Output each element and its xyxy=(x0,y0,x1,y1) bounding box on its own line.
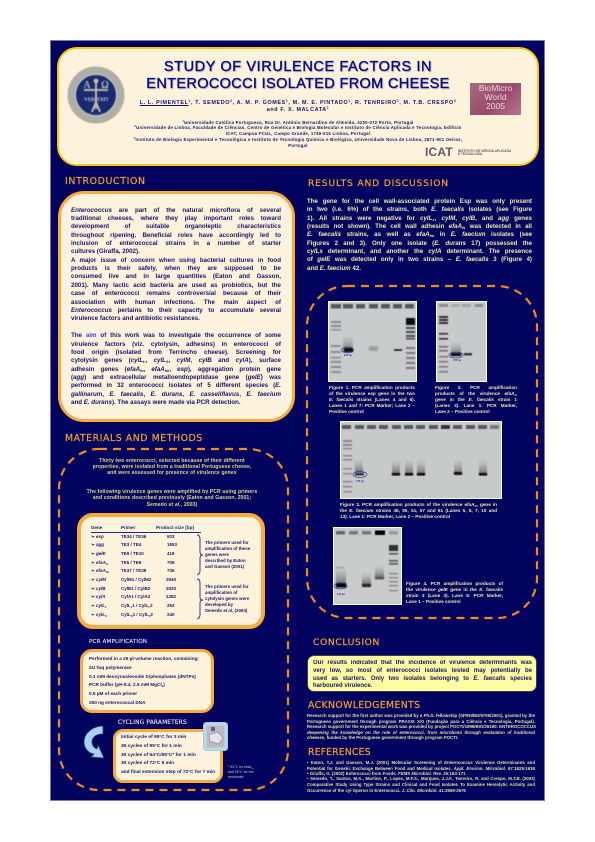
text: cycling steps: Initial cycle of 95°C for 3 min xyxy=(121,735,186,740)
text: results: of gelE was detected only in two strains – E. faecalis 3 (Figure 4) xyxy=(307,256,532,263)
panel: primer table xyxy=(77,513,265,629)
caption: figure 2: products of the virulence efaAfs xyxy=(435,391,517,397)
text: primer notes: developed by xyxy=(205,602,233,607)
table: genes and primers: ➢ efaA fm xyxy=(91,568,109,574)
text: introduction: adhesin genes (efaAfs, efaAfm, esp), aggregation protein gene xyxy=(71,366,281,373)
text: PCR recipe: 0.5 µM of each primer xyxy=(89,691,137,696)
text: primer notes: described by Eaton xyxy=(205,558,246,563)
table: genes and primers: TE9 / TE10 xyxy=(121,551,144,556)
table: genes and primers: CylM1 / CylM2 xyxy=(121,577,151,582)
text: references: • Giraffa, G. (2002) Enterococci from Foods. FEMS Microbiol. Rev. 26:163-171 xyxy=(307,770,465,776)
caption: figure 4: strain 3 (Lane 3). Lane 5: PCR Marker, xyxy=(406,593,503,598)
text: conclusion xyxy=(313,660,532,689)
text: introduction: gallinarum, E. faecalis, E. durans, E. casseliflavus, E. faecium xyxy=(71,391,281,398)
caption: figure 2 xyxy=(435,385,517,414)
table: genes and primers: ➢ cylB xyxy=(91,586,106,591)
text: cycling steps: 35 cycles of 95°C for 1 min xyxy=(121,744,182,749)
text: PCR recipe xyxy=(89,656,199,705)
logo: university seal xyxy=(67,66,125,124)
text: methods intro: and conditions described previously (Eaton and Gasson, 2001; xyxy=(93,495,251,501)
caption: figure 1 xyxy=(329,385,415,414)
table: genes and primers: TE3 / TE4 xyxy=(121,542,141,547)
text: introduction: virulence factors (viz. cytolysin, adhesins) in enterococci of xyxy=(71,341,281,348)
logo: BioMicroWorld 2005: BioMicro xyxy=(479,83,512,93)
panel: PCR amplification xyxy=(80,649,214,713)
text: introduction: virulence factors and antibiotic resistances. xyxy=(71,315,200,322)
text: methods intro: The following virulence genes were amplified by PCR using primers xyxy=(87,489,257,495)
text: methods intro: Thirty two enterococci, selected because of their different xyxy=(99,458,245,464)
text: introduction: traditional cheeses, where they play important roles toward xyxy=(71,215,281,222)
text: introduction: cultures (Giraffa, 2002). xyxy=(71,248,140,255)
heading: conclusion: CONCLUSION xyxy=(313,637,380,648)
table: genes and primers: CylL S1 / CylL S2 xyxy=(121,612,153,618)
caption: figure 1: Lanes 1 and 7: PCR Marker; Lane 2 – xyxy=(329,403,415,408)
heading: PCR amplification: PCR AMPLIFICATION xyxy=(89,639,147,645)
text: acknowledgements: cheeses, funded by the Portuguese government through program POCTI. xyxy=(307,735,458,740)
table: genes and primers: 253 xyxy=(167,603,175,608)
table: genes and primers: 240 xyxy=(167,612,175,617)
text: PCR recipe: 250 ng enterococcal DNA xyxy=(89,700,146,705)
text: acknowledgements: deepening the knowledge on the role of enterococci, from microbiota through evaluation of traditional xyxy=(307,730,535,734)
text: introduction: inclusion of enterococcal strains in a number of starter xyxy=(71,240,281,247)
text: primer notes: The primers used for xyxy=(205,540,249,545)
caption: figure 3 xyxy=(340,502,497,519)
text: introduction: throughout ripening. Beneficial roles have accordingly led to xyxy=(71,232,281,239)
text: methods intro: properties, were isolated from a traditional Portuguese cheese, xyxy=(93,464,251,470)
figure 1: gel: 933 bp xyxy=(344,353,353,357)
icon: thermocycler photo xyxy=(203,722,228,751)
text: acknowledgements: Research support for the first author was provided by a Ph.D. fellowship (SFRH/BD/6795/2001), granted by the xyxy=(307,713,535,718)
text: results: (results not shown). The cell wall adhesin efaAfs was detected in all xyxy=(307,223,532,230)
header panel xyxy=(57,47,539,166)
text: introduction: cytolysin genes (cylLL, cylLS, cylM, cylB and cylA), surface xyxy=(71,357,281,364)
table: genes and primers: ➢ agg xyxy=(91,542,104,547)
table: genes and primers: TE37 / TE38 xyxy=(121,568,146,573)
title xyxy=(146,59,450,92)
authors: L. L. PIMENTEL1, T. SEMEDO2, A. M. P. GOMES1, M. M. E. PINTADO1, R. TENREIRO2, M. T.B. CRESPO3 xyxy=(140,99,456,106)
text: introduction: consumed live and in large quantities (Eaton and Gasson, xyxy=(71,273,281,280)
table: genes and primers: Product size (bp) xyxy=(156,525,194,530)
panel: results dashed frame xyxy=(306,284,538,620)
heading: acknowledgements: ACKNOWLEDGEMENTS xyxy=(308,700,420,711)
figure 4: gel: 419 bp xyxy=(337,592,346,596)
caption: figure 2: gene in the E. faecalis strain 1 xyxy=(435,397,517,402)
text: introduction: and E. durans). The assays were made via PCR detection. xyxy=(71,399,241,406)
affiliations xyxy=(134,120,462,148)
caption: figure 2: (Lanes 3). Lane 1: PCR Marker, xyxy=(435,403,517,408)
heading: cycling parameters: CYCLING PARAMETERS xyxy=(118,720,187,726)
panel: conclusion xyxy=(307,655,537,692)
caption: figure 4: Figure 4. PCR amplification products of xyxy=(406,581,503,586)
text: methods intro: Semedo et al., 2003) xyxy=(147,502,197,508)
text: PCR recipe: 2U Taq polymerase xyxy=(89,665,132,670)
text: results: 1). All strains were negative for cylLL, cylM, cylB, and agg genes xyxy=(307,215,532,222)
table: genes and primers: CylL L1 / CylL L2 xyxy=(121,603,153,609)
poster background xyxy=(50,40,545,801)
caption: figure 1: Figure 1. PCR amplification products xyxy=(329,385,415,390)
table: genes and primers: 2940 xyxy=(166,577,176,582)
heading: introduction: INTRODUCTION xyxy=(65,176,146,187)
table: genes and primers: 1282 xyxy=(166,594,176,599)
text: primer notes: genes were xyxy=(205,552,229,557)
panel: methods dashed frame xyxy=(58,448,290,792)
text: results: and E. faecium 42. xyxy=(307,265,361,272)
text: cycling steps: 35 cycles of 72°C 5 min xyxy=(121,761,174,766)
logo: university seal: Ω xyxy=(101,80,109,91)
text: results: E. faecalis strains, as well as efaAfm in E. faecium isolates (see xyxy=(307,231,532,238)
text: introduction: case of enterococci remains controversial because of their xyxy=(71,290,281,297)
table: genes and primers xyxy=(91,525,201,618)
logo: BioMicroWorld 2005: World xyxy=(484,92,507,102)
figure 2: gel xyxy=(436,301,487,382)
text: cycling steps: 35 cycles of 54°C/55°C* for 1 min xyxy=(121,753,196,758)
table: genes and primers: CylB1 / CylB2 xyxy=(121,586,150,591)
caption: figure 1: E. faecalis strains (Lanes 4 and 6). xyxy=(329,397,415,402)
table: genes and primers: 933 xyxy=(167,534,175,539)
text: introduction: A major issue of concern when using bacterial cultures in food xyxy=(71,257,281,264)
caption: figure 3: 13). Lane 1: PCR Marker, Lane 2 – Positive control xyxy=(340,514,450,519)
icon: curved arrow xyxy=(84,726,104,758)
text: conclusion: Our results indicated that the incidence of virulence determinants was xyxy=(313,660,532,666)
logo: ICAT xyxy=(425,145,512,159)
table: genes and primers: 2020 xyxy=(166,586,176,591)
title: ENTEROCOCCI ISOLATED FROM CHEESE xyxy=(146,76,450,92)
text: introduction: performed in 32 enterococci isolates of 5 different species (E. xyxy=(71,382,281,389)
table: genes and primers: Primer xyxy=(121,525,135,530)
title: STUDY OF VIRULENCE FACTORS IN xyxy=(164,59,432,75)
text: PCR recipe: PCR buffer (pH 8.4, 2.5 mM MgCl2) xyxy=(89,682,165,688)
table: genes and primers: CylA1 / CylA2 xyxy=(121,594,150,599)
table: genes and primers: ➢ cylA xyxy=(91,594,106,599)
text: references: Occurrence of the cyl Operon in Enterococci. J. Clin. Microbiol. 41:2569-2576 xyxy=(307,788,466,792)
affiliations: ICAT, Campus FCUL, Campo Grande, 1749-016 Lisboa, Portugal xyxy=(226,131,370,136)
text: introduction: 2001). Many lactic acid bacteria are used as probiotics, but the xyxy=(71,282,281,289)
text: primer notes: amplification of xyxy=(205,590,237,595)
figure 1: gel xyxy=(328,301,417,382)
text: conclusion: harboured virulence. xyxy=(313,683,372,689)
text: primer notes: and Gasson (2001) The primers used for xyxy=(205,564,249,589)
table: genes and primers: TE34 / TE36 xyxy=(121,534,146,539)
figure 3: gel xyxy=(340,421,502,499)
text: results: in two (i.e. 6%) of the strains, both E. faecalis isolates (see Figure xyxy=(307,206,532,213)
table: genes and primers: 705 xyxy=(167,560,175,565)
text: acknowledgements: Research support for the experimental work was provided by project POCTI/1999/BIO/35190: ENTEROCOCCUS xyxy=(307,724,536,729)
figure 2: gel: 705 bp xyxy=(453,358,462,362)
caption: figure 1: Positive control xyxy=(329,409,364,414)
text: introduction: Enterococcus are part of the natural microflora of several xyxy=(71,207,281,214)
text: PCR recipe: 0.1 mM deoxynucleoside triphosphates (dNTPs) xyxy=(89,674,196,679)
text: methods intro xyxy=(86,458,257,508)
caption: figure 4: the virulence gelE gene in the E. faecalis xyxy=(406,587,503,592)
text: introduction: food origin (isolated from Terrincho cheese). Screening for xyxy=(71,349,281,356)
table: genes and primers: ➢ cylL L xyxy=(91,603,107,609)
table: genes and primers: TE5 / TE6 xyxy=(121,560,141,565)
table: genes and primers: ➢ cylL S xyxy=(91,612,107,618)
text: PCR recipe: Performed in a 25 µl-volume reaction, containing: xyxy=(89,656,199,661)
table: genes and primers: ➢ gelE xyxy=(91,551,106,556)
text: references xyxy=(307,760,535,793)
text: introduction: (agg) and extracellular metalloendopeptidase gene (gelE) was xyxy=(71,374,281,381)
heading: results and discussion: RESULTS AND DISCUSSION xyxy=(308,178,449,189)
text: primer notes xyxy=(205,540,250,613)
logo: BioMicroWorld 2005 xyxy=(470,83,521,115)
logo: ICAT: E TECNOLOGIA xyxy=(458,152,482,156)
table: genes and primers: 735 xyxy=(167,568,175,573)
text: references: • Semedo, T., Santos, M.A., Martins, P., Lopes, M.F.S., Marques, J.J.F., Tenreiro, R. and Crespo, M.T.B. (2003) xyxy=(307,776,535,781)
caption: figure 3: Figure 3. PCR amplification products of the virulence efaAfm gene in xyxy=(340,502,497,508)
caption: figure 4 xyxy=(406,581,504,604)
table: genes and primers: ➢ cylM xyxy=(91,577,106,582)
heading: materials and methods: MATERIALS AND METHODS xyxy=(65,433,203,444)
table: genes and primers: ➢ esp xyxy=(91,534,104,539)
table: genes and primers: 1553 xyxy=(167,542,177,547)
icon: table braces xyxy=(196,534,203,620)
affiliations: Portugal xyxy=(288,143,308,148)
logo: BioMicroWorld 2005: 2005 xyxy=(486,101,505,111)
footnote: * 54°C for efaA fm xyxy=(228,765,254,770)
logo: university seal: Α xyxy=(83,80,91,91)
caption: figure 2: Figure 2. PCR amplification xyxy=(435,385,517,390)
footnote: and 55°C for the xyxy=(228,770,254,774)
caption: figure 3: the E. faecium strains 45, 50, 51, 57 and 61 (Lanes 5, 6, 7, 10 and xyxy=(340,508,497,513)
heading: references: REFERENCES xyxy=(308,747,371,758)
text: introduction: products is their safety, when they are supposed to be xyxy=(71,265,281,272)
text: introduction: association with human infections. The main aspect of xyxy=(71,299,281,306)
panel: introduction xyxy=(58,191,295,422)
text: primer notes: cytolysin genes were xyxy=(205,596,249,601)
text: cycling steps xyxy=(121,734,215,775)
text: primer notes: Semedo et al. (2003) xyxy=(205,608,247,613)
panel: cycling parameters xyxy=(113,729,223,783)
text: methods intro: and were assessed for presence of virulence genes xyxy=(107,470,237,476)
authors xyxy=(140,99,456,113)
text: cycling steps: and final extension step of 72°C for 7 min xyxy=(121,770,215,775)
caption: figure 1: of the virulence esp gene in the two xyxy=(329,391,415,396)
text: acknowledgements: Portuguese government through program PRAXIS XXI (Fundação para a Ciência e Tecnologia, Portugal). xyxy=(307,718,535,724)
text: references: Potential for Genetic Exchange Between Food and Medical Isolates. Appl. Environ. Microbiol. 67:1628-1635 xyxy=(307,766,535,770)
authors: and F. X. MALCATA1 xyxy=(267,106,329,113)
affiliations: 1Universidade Católica Portuguesa, Rua Dr. António Bernardino de Almeida, 4200-072 Porto, Portugal xyxy=(182,120,414,124)
text: results xyxy=(307,198,532,272)
text: introduction xyxy=(71,207,281,406)
text: introduction: Enterococcus pertains to their capacity to accumulate several xyxy=(71,307,281,314)
text: acknowledgements xyxy=(307,713,536,740)
text: conclusion: used as starters. Only two isolates belonging to E. faecalis species xyxy=(313,676,532,682)
text: introduction: The aim of this work was to investigate the occurrence of some xyxy=(71,332,281,339)
text: introduction: development of suitable organoleptic characteristics xyxy=(71,223,281,230)
affiliations: 2Universidade de Lisboa, Faculdade de Ciências, Centro de Genética e Biologia Molecular e Instituto de Ciência Aplicada e Tecnologia, Edifício xyxy=(134,125,462,130)
table: genes and primers: ➢ efaA fs xyxy=(91,560,108,566)
text: results: The gene for the cell wall-associated protein Esp was only present xyxy=(307,198,532,205)
table: genes and primers: Gene xyxy=(91,525,102,530)
logo: ICAT: ICAT xyxy=(425,145,453,159)
text: results: Figures 2 and 3). Only one isolate (E. durans 17) possessed the xyxy=(307,240,532,247)
logo: ICAT: INSTITUTO DE CIÊNCIA APLICADA xyxy=(458,148,511,152)
logo: university seal: VERITATI xyxy=(84,97,108,103)
table: genes and primers: 419 xyxy=(167,551,175,556)
figure 3: gel: 735 bp xyxy=(356,479,365,483)
text: primer notes: amplification of these xyxy=(205,546,250,551)
text: references: Comparative Study Using Type Strains and Clinical and Food Isolates To Examine Hemolytic Activity and xyxy=(307,782,535,787)
text: results: cylLs determinant, and another the cylA determinant. The presence xyxy=(307,248,532,255)
figure 4: gel xyxy=(333,527,402,605)
caption: figure 2: Lane 2 – Positive control xyxy=(435,409,490,414)
affiliations: 3Instituto de Biologia Experimental e Tecnológica e Instituto de Tecnologia Química e Biológica, Universidade Nova de Lisboa, 2871-901 Oeiras, xyxy=(134,137,462,142)
text: conclusion: very low, so most of enterococci isolates tested may potentially be xyxy=(313,668,532,674)
caption: figure 4: Lane 1 – Positive control xyxy=(406,599,461,604)
text: references: • Eaton, T.J. and Gasson, M.J. (2001) Molecular Screening of Enterococcus Virulence Determinants and xyxy=(307,760,535,765)
footnote xyxy=(228,765,254,779)
footnote: remainder xyxy=(228,775,244,779)
